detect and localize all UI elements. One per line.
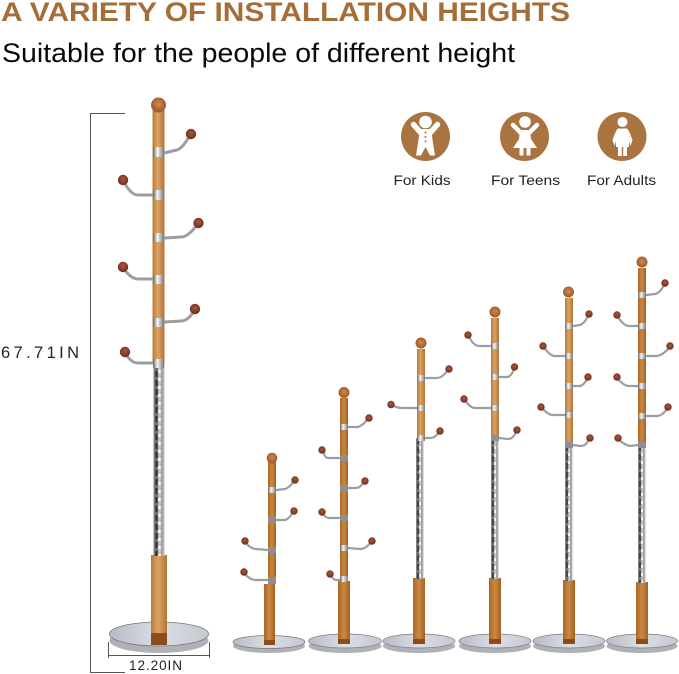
coat rack 1 xyxy=(233,453,305,653)
label: for teens: For Teens xyxy=(491,173,560,188)
coat rack 6 xyxy=(606,256,678,653)
icon: kids xyxy=(401,112,450,161)
subtitle: Suitable for the people of different height xyxy=(2,38,516,68)
icon: teens xyxy=(500,112,549,161)
label: for kids: For Kids xyxy=(394,173,451,188)
coat rack 3 xyxy=(383,338,455,653)
coat rack 2 xyxy=(308,387,382,653)
height dimension bracket xyxy=(90,114,125,672)
width dimension bracket xyxy=(108,642,210,658)
coat rack 5 xyxy=(533,286,605,653)
width label: 12.20IN xyxy=(129,658,182,673)
icon: adults xyxy=(598,112,646,161)
height label: 67.71IN xyxy=(1,344,79,362)
label: for adults: For Adults xyxy=(587,173,656,188)
coat rack 4 xyxy=(459,306,531,653)
large coat rack xyxy=(110,98,208,653)
